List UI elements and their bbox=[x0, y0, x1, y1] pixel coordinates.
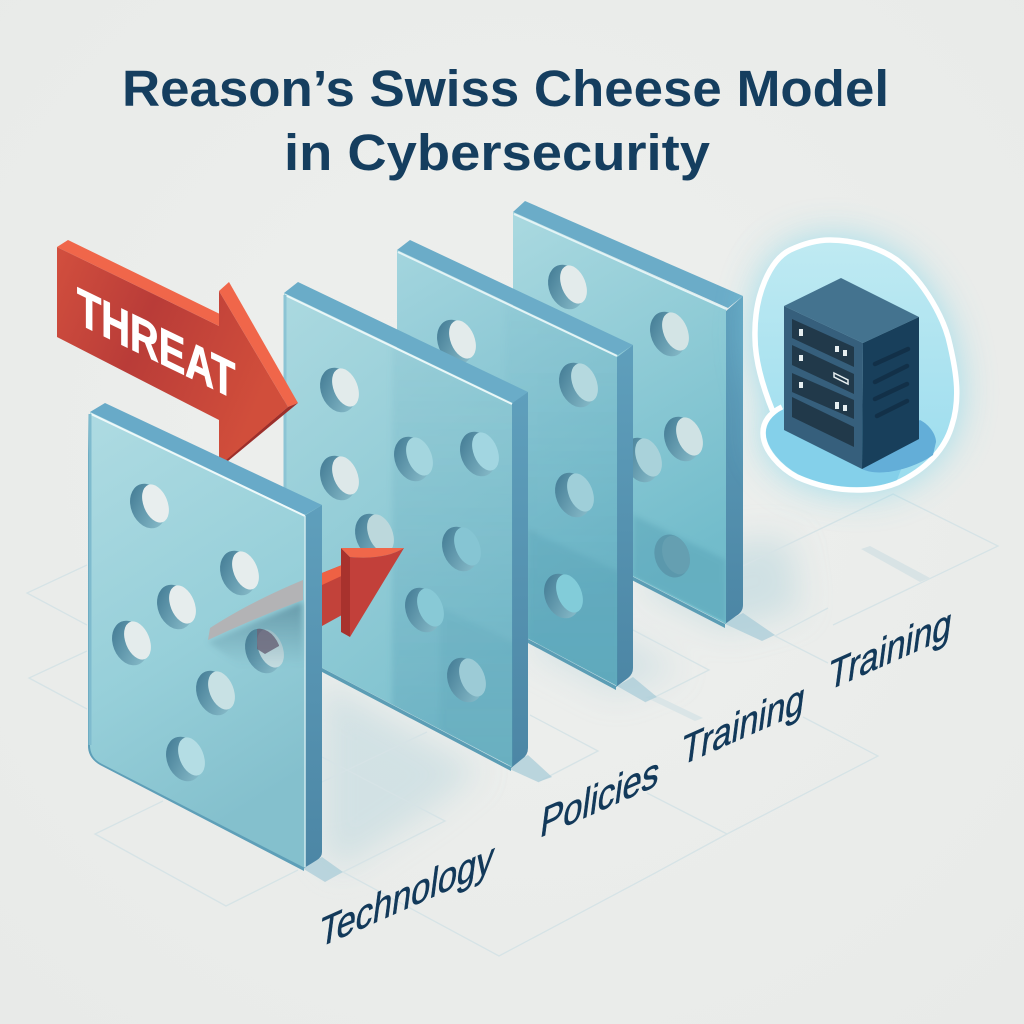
label: policies: Policies bbox=[538, 746, 663, 848]
floor haze bbox=[322, 540, 800, 870]
floor grid bbox=[27, 494, 998, 956]
shield outline bbox=[755, 240, 957, 490]
floor mark dash bbox=[861, 546, 930, 582]
panel 1: technology layer bbox=[88, 403, 322, 871]
holes: panel 3 bbox=[431, 314, 603, 624]
protected server group bbox=[755, 240, 957, 490]
holes: panel 4 bbox=[542, 259, 708, 582]
label: training: Training bbox=[679, 672, 808, 776]
panel 3: training layer bbox=[397, 240, 633, 700]
glow bbox=[755, 240, 957, 490]
server floor shadow bbox=[862, 420, 936, 472]
title: in Cybersecurity bbox=[284, 124, 711, 181]
label: technology: Technology bbox=[317, 831, 498, 958]
holes: panel 1 bbox=[106, 478, 289, 787]
icon: server rack bbox=[784, 278, 919, 469]
title: Reason’s Swiss Cheese Model bbox=[122, 60, 889, 117]
title bbox=[122, 60, 889, 181]
label: training second: Training bbox=[826, 597, 955, 701]
floor blob bbox=[766, 400, 920, 487]
threat label: THREAT bbox=[77, 277, 235, 411]
arrow ghost seen through panel bbox=[208, 580, 304, 666]
floor mark dash lower bbox=[645, 695, 703, 721]
panel foot shadows bbox=[302, 613, 775, 882]
layer labels bbox=[317, 597, 955, 958]
small arrow passing through the layers bbox=[322, 548, 404, 637]
panel 2: policies layer bbox=[284, 282, 528, 780]
threat arrow bbox=[57, 240, 298, 461]
panel 4: back training layer bbox=[513, 201, 743, 628]
holes: panel 2 bbox=[314, 362, 504, 708]
